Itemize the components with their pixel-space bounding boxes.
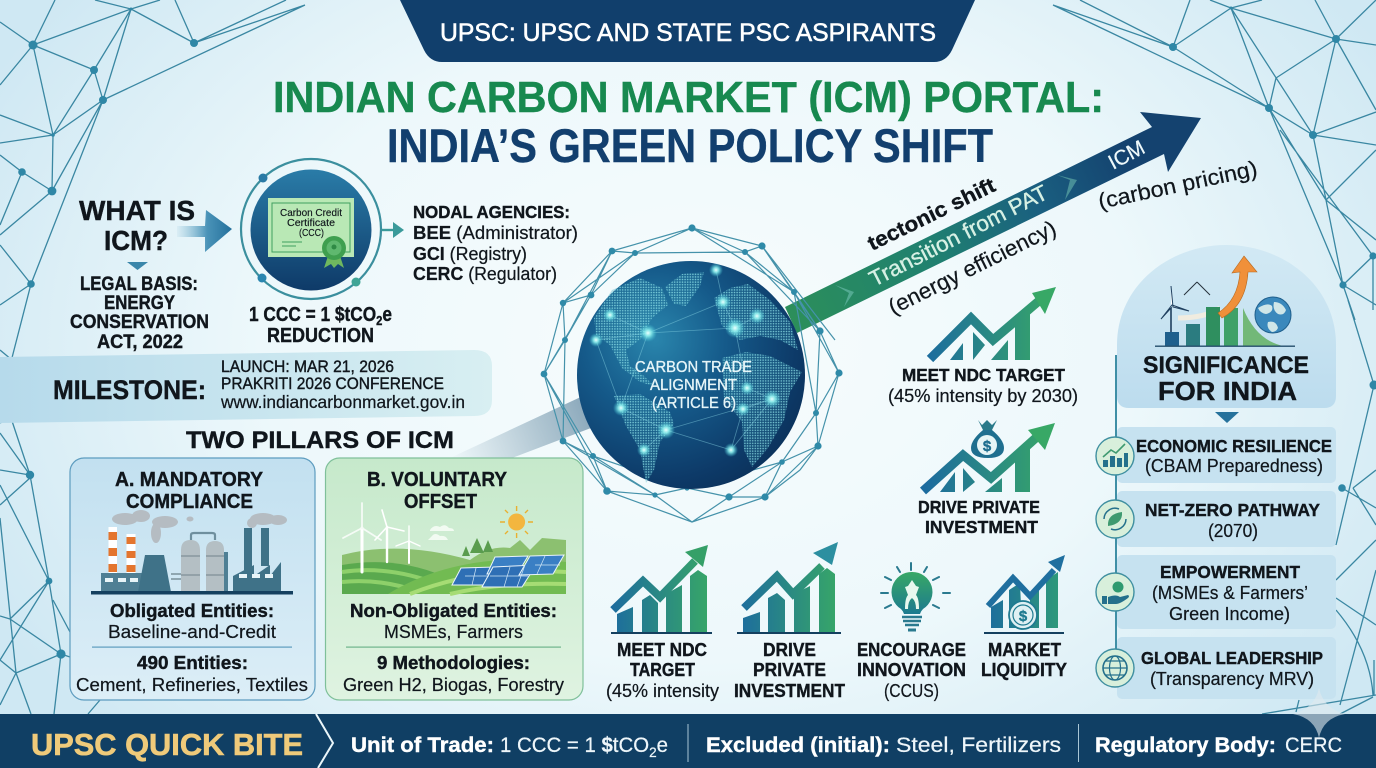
title: INDIAN CARBON MARKET (ICM) PORTAL:	[273, 73, 1104, 122]
text: meet NDC (bottom): TARGET	[630, 660, 695, 680]
text: non-obligated: Non-Obligated Entities:	[350, 601, 557, 621]
background network: left	[0, 0, 305, 714]
icon: factory	[91, 510, 293, 594]
text: legal basis: ENERGY	[104, 293, 175, 314]
icon: drive private investment (middle): $	[983, 438, 992, 455]
icon: economic	[1096, 437, 1134, 475]
icon: down triangle	[127, 262, 148, 270]
title: INDIA’S GREEN POLICY SHIFT	[387, 119, 993, 172]
globe label: ALIGNMENT	[650, 377, 737, 394]
text: meet NDC (bottom)	[606, 640, 719, 701]
footer bar	[0, 714, 1376, 768]
globe	[577, 261, 805, 489]
text: 490 entities: 490 Entities:	[137, 653, 248, 673]
icon: private investment chart (bottom)	[737, 542, 841, 634]
row: net-zero pathway: NET-ZERO PATHWAY	[1145, 500, 1320, 520]
top banner	[400, 0, 975, 62]
text: market liquidity: MARKET	[988, 640, 1061, 660]
icon: empowerment	[1096, 573, 1134, 611]
panel: milestone: LAUNCH: MAR 21, 2026	[221, 358, 394, 376]
text: non-obligated	[350, 601, 557, 642]
panel: milestone	[0, 350, 492, 423]
row: empowerment	[1096, 555, 1336, 629]
text: drive private investment (middle): INVESTMENT	[925, 517, 1038, 537]
label: transition: Transition from PAT	[865, 180, 1052, 291]
heading: what is ICM: WHAT IS	[79, 195, 195, 226]
arrow: certificate to agencies	[382, 222, 404, 238]
globe label	[635, 359, 752, 412]
text: meet NDC (bottom): MEET NDC	[617, 640, 707, 660]
footer: unit of trade: 1 CCC = 1 $tCO	[500, 734, 650, 757]
text: nodal agencies: NODAL AGENCIES:	[413, 202, 570, 222]
text: obligated entities	[108, 601, 276, 642]
text: methodologies	[343, 653, 564, 695]
text: market liquidity: LIQUIDITY	[981, 660, 1067, 680]
globe label: CARBON TRADE	[635, 359, 752, 376]
icon: drive private investment (middle)	[923, 420, 1055, 492]
heading: significance: FOR INDIA	[1158, 376, 1297, 406]
text: encourage innovation: (CCUS)	[884, 681, 939, 701]
band: gray tail behind globe	[450, 388, 612, 458]
footer: regulatory body: CERC	[1285, 734, 1342, 757]
text: nodal agencies: CERC (Regulator)	[413, 264, 557, 284]
text: drive private investment (middle): DRIVE PRIVATE	[918, 497, 1040, 517]
icon: carbon credit certificate: (CCC)	[299, 227, 324, 239]
globe network	[541, 224, 843, 522]
text: non-obligated: MSMEs, Farmers	[384, 622, 523, 642]
text: nodal agencies	[413, 202, 578, 284]
text: CCC equation: e	[382, 304, 392, 326]
text: encourage innovation	[857, 640, 966, 701]
footer: regulatory body: Regulatory Body:	[1095, 734, 1276, 757]
icon: innovation bulb	[881, 563, 950, 630]
panel: voluntary offset	[326, 458, 583, 700]
row: global leadership: (Transparency MRV)	[1150, 669, 1314, 689]
icon: green landscape	[342, 503, 566, 594]
icon: growth skyline	[1155, 256, 1295, 347]
text: 490 entities: Cement, Refineries, Textiles	[76, 675, 308, 695]
row: empowerment: Green Income)	[1169, 604, 1290, 624]
icon: net zero	[1096, 500, 1134, 538]
footer heading: UPSC QUICK BITE	[31, 727, 303, 762]
row: empowerment: (MSMEs & Farmers’	[1152, 583, 1308, 603]
icon: carbon credit certificate	[241, 159, 381, 299]
icon: market liquidity: $	[1019, 608, 1028, 625]
text: methodologies: Green H2, Biogas, Forestry	[343, 675, 564, 695]
continents	[594, 272, 802, 483]
label: energy efficiency: (energy efficiency)	[884, 215, 1060, 319]
text: drive private (bottom): INVESTMENT	[734, 681, 845, 701]
row: global leadership	[1096, 637, 1336, 699]
globe label: (ARTICLE 6)	[652, 395, 736, 412]
text: nodal agencies: BEE (Administrator)	[413, 223, 578, 243]
row: net-zero pathway	[1096, 491, 1336, 547]
text: legal basis	[70, 274, 209, 353]
heading A: A. MANDATORY	[115, 469, 264, 491]
text: nodal agencies: GCI (Registry)	[413, 244, 527, 264]
title	[273, 73, 1104, 172]
arrow: policy shift	[785, 112, 1259, 333]
footer: unit of trade: 2	[649, 744, 657, 760]
heading B	[367, 469, 508, 513]
row: economic resilience: (CBAM Preparedness)	[1145, 456, 1323, 476]
label: tectonic shift: tectonic shift	[864, 174, 999, 255]
text: encourage innovation: INNOVATION	[857, 660, 966, 680]
text: meet NDC target (middle)	[888, 365, 1078, 406]
text: market liquidity	[981, 640, 1067, 680]
label: ICM: ICM	[1105, 136, 1149, 174]
text: methodologies: 9 Methodologies:	[377, 653, 530, 673]
watermark star	[1293, 688, 1345, 738]
top banner: UPSC: UPSC AND STATE PSC ASPIRANTS	[440, 19, 936, 47]
text: obligated entities: Obligated Entities:	[110, 601, 274, 621]
icon: market liquidity	[984, 555, 1065, 634]
text: CCC equation	[249, 304, 392, 347]
row: economic resilience: ECONOMIC RESILIENCE	[1136, 436, 1332, 456]
text: 490 entities	[76, 653, 308, 695]
heading: two pillars: TWO PILLARS OF ICM	[186, 427, 454, 454]
heading: significance: SIGNIFICANCE	[1143, 352, 1309, 379]
heading: significance	[1143, 352, 1309, 406]
panel: milestone: PRAKRITI 2026 CONFERENCE	[221, 375, 444, 393]
footer: excluded: Steel, Fertilizers	[896, 734, 1061, 757]
label: carbon pricing: (carbon pricing)	[1096, 156, 1259, 214]
text: CCC equation: 2	[376, 313, 382, 328]
row: net-zero pathway: (2070)	[1208, 521, 1258, 541]
row: empowerment: EMPOWERMENT	[1160, 562, 1300, 582]
footer: unit of trade	[351, 734, 668, 760]
icon: carbon credit certificate: Certificate	[287, 217, 335, 229]
arrow: what is to certificate	[177, 210, 232, 252]
icon: global	[1096, 649, 1134, 687]
panel: mandatory compliance	[70, 458, 315, 700]
text: legal basis: ACT, 2022	[97, 332, 183, 353]
text: legal basis: CONSERVATION	[70, 312, 209, 333]
row: economic resilience	[1096, 427, 1336, 483]
text: CCC equation: 1 CCC = 1 $tCO	[249, 304, 396, 326]
panel: milestone: MILESTONE:	[53, 375, 206, 405]
icon: meet NDC target (middle)	[930, 287, 1056, 360]
text: CCC equation: REDUCTION	[267, 325, 374, 347]
text: drive private (bottom)	[734, 640, 845, 701]
text: drive private (bottom): PRIVATE	[753, 660, 826, 680]
footer: excluded	[706, 734, 1061, 757]
icon: meet NDC chart (bottom)	[611, 545, 712, 634]
text: meet NDC (bottom): (45% intensity	[606, 681, 719, 701]
arch header	[1117, 245, 1336, 408]
text: encourage innovation: ENCOURAGE	[857, 640, 966, 660]
heading B: OFFSET	[404, 491, 477, 513]
text: legal basis: LEGAL BASIS:	[80, 274, 198, 295]
heading A	[115, 469, 264, 513]
heading A: COMPLIANCE	[126, 491, 253, 513]
heading: what is ICM	[79, 195, 195, 256]
row: global leadership: GLOBAL LEADERSHIP	[1141, 648, 1323, 668]
text: meet NDC target (middle): MEET NDC TARGET	[902, 365, 1065, 385]
footer: unit of trade: e	[657, 734, 668, 757]
text: drive private investment (middle)	[918, 497, 1040, 537]
text: meet NDC target (middle): (45% intensity by 2030)	[888, 386, 1078, 406]
panel: significance for India	[1096, 245, 1336, 699]
background network: right	[1053, 0, 1376, 714]
heading: what is ICM: ICM?	[104, 225, 168, 256]
text: drive private (bottom): DRIVE	[763, 640, 816, 660]
text: obligated entities: Baseline-and-Credit	[108, 622, 276, 642]
footer: unit of trade: Unit of Trade:	[351, 734, 494, 757]
panel: milestone: www.indiancarbonmarket.gov.in	[220, 392, 465, 412]
footer: excluded: Excluded (initial):	[706, 734, 890, 757]
heading B: B. VOLUNTARY	[367, 469, 508, 491]
icon: carbon credit certificate: Carbon Credit	[280, 207, 342, 219]
